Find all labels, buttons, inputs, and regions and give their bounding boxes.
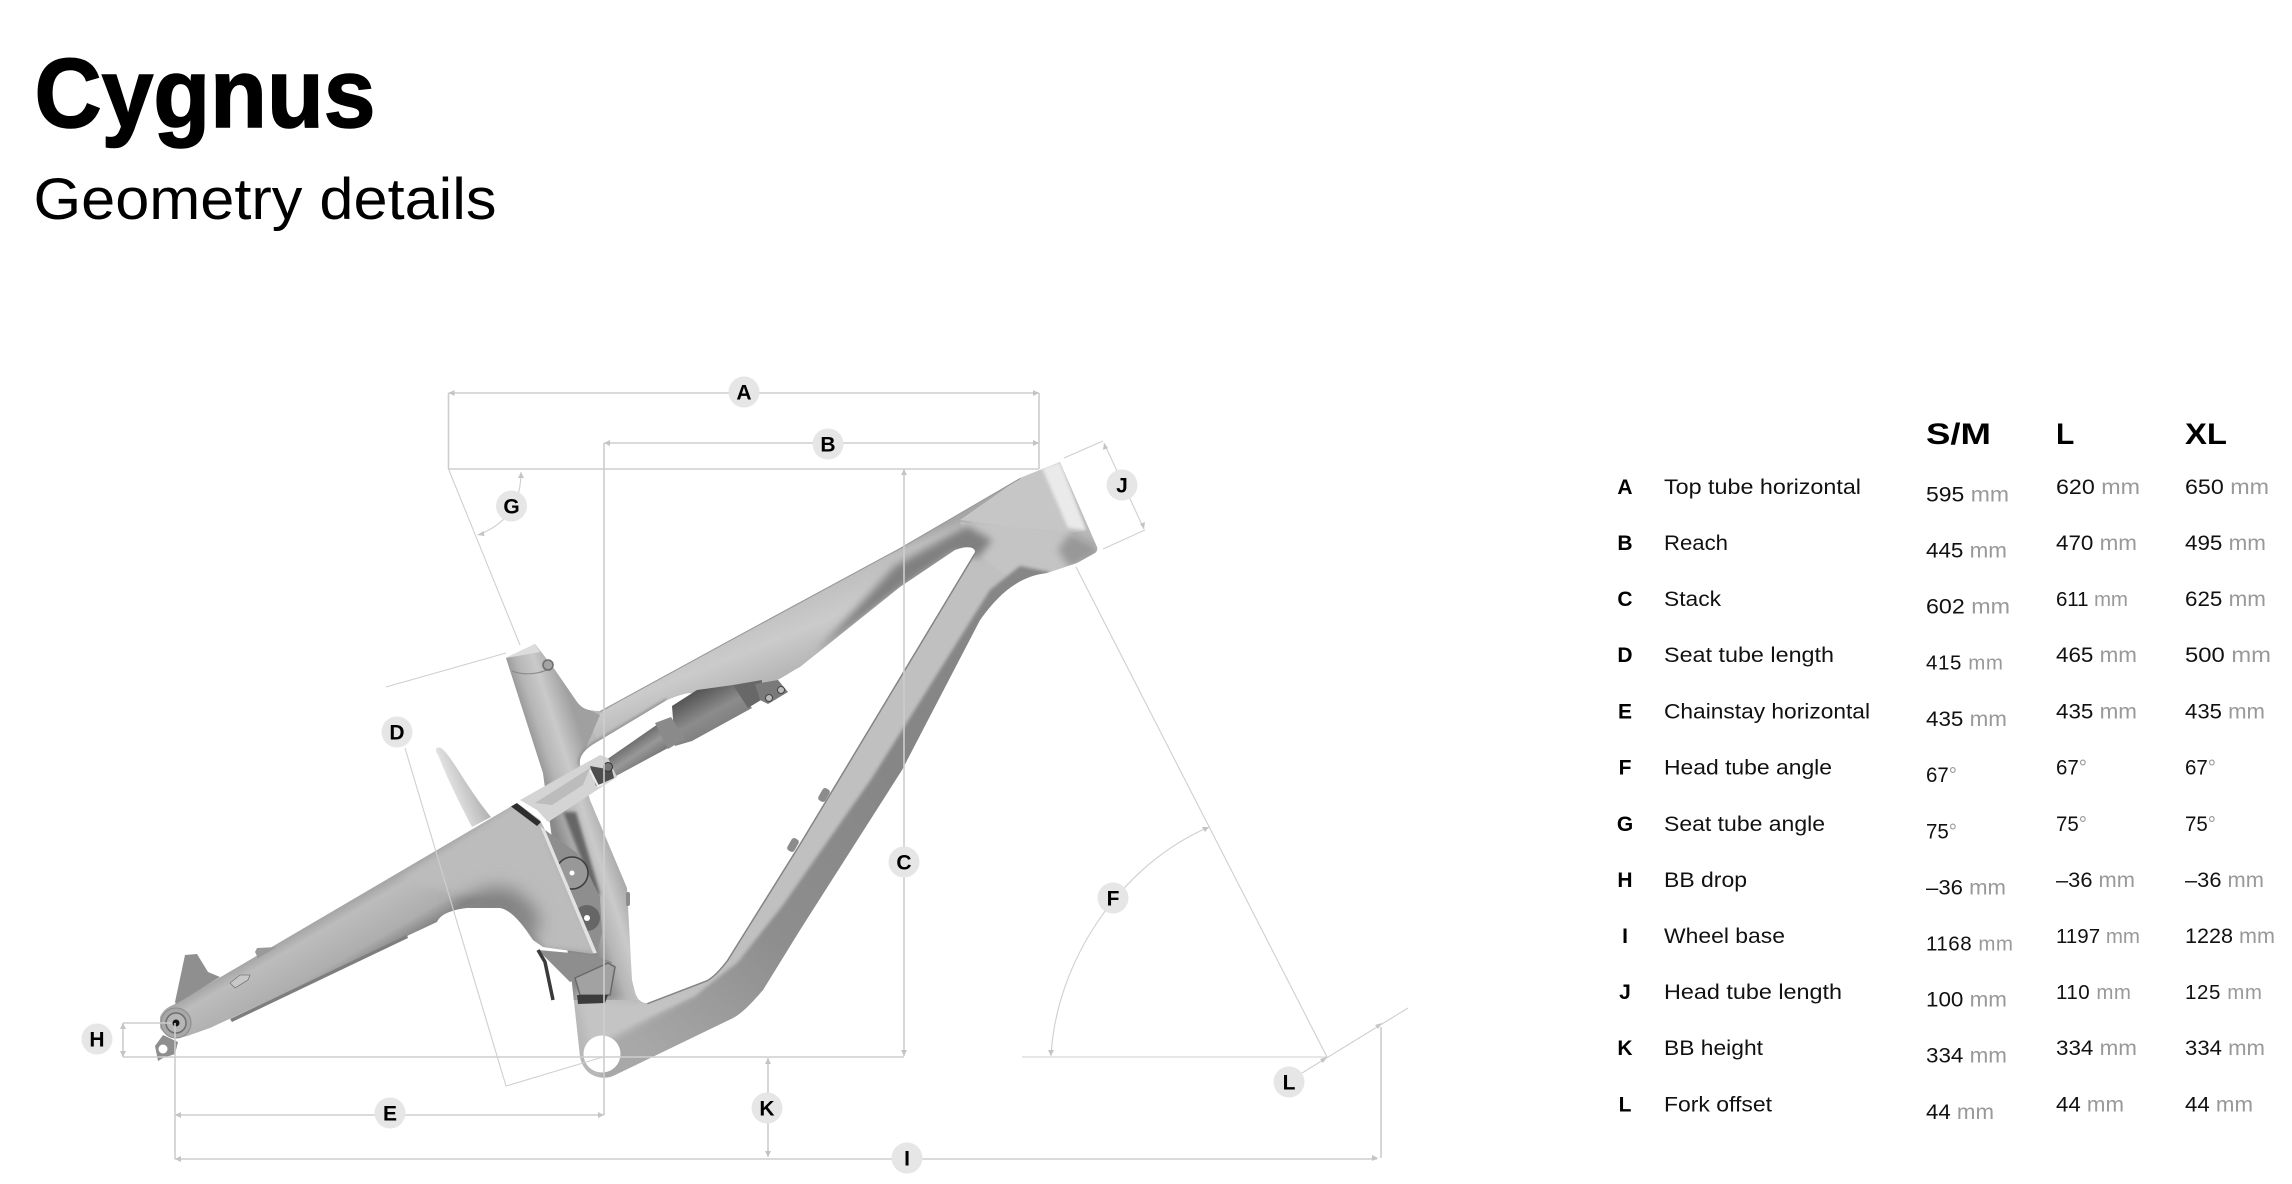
row G: 75° <box>1926 820 1957 844</box>
row K: 334 mm <box>1926 1044 2007 1068</box>
dimension A: A <box>736 382 752 404</box>
row K <box>1617 1037 2265 1068</box>
dimension lines <box>82 376 1408 1174</box>
row E: 435 mm <box>2056 700 2137 724</box>
dimension B <box>604 428 1039 1115</box>
row I: 1168 mm <box>1926 932 2013 956</box>
row A: 650 mm <box>2185 476 2269 499</box>
row H: H <box>1617 869 1633 892</box>
row A: 595 mm <box>1926 484 2009 506</box>
row A: Top tube horizontal <box>1664 476 1861 499</box>
seat tube shadow <box>563 812 600 900</box>
geometry table <box>1617 418 2275 1124</box>
row B: Reach <box>1664 532 1728 555</box>
dimension G <box>448 469 527 645</box>
dimension H <box>82 1023 172 1057</box>
row K: BB height <box>1664 1037 1763 1060</box>
row B <box>1617 532 2266 562</box>
row L: Fork offset <box>1664 1094 1772 1116</box>
seat tube boss <box>626 892 630 906</box>
row I: Wheel base <box>1664 925 1785 948</box>
row A: 620 mm <box>2056 476 2140 499</box>
dimension B: B <box>820 434 836 456</box>
row B: 470 mm <box>2056 532 2137 555</box>
dimension D <box>382 653 603 1086</box>
dimension I: I <box>904 1148 910 1170</box>
row J <box>1619 981 2262 1012</box>
row D: D <box>1617 644 1633 667</box>
dropout <box>155 1008 191 1061</box>
row D <box>1617 644 2271 674</box>
subtitle: Geometry details <box>34 167 496 232</box>
dimension D: D <box>389 722 405 744</box>
dimension G: G <box>503 496 520 518</box>
dimension K <box>752 1058 782 1157</box>
row G: G <box>1617 813 1633 836</box>
column headers: L <box>2056 418 2074 451</box>
brake mount <box>175 954 220 1004</box>
row A <box>1617 476 2269 506</box>
fender <box>436 747 491 827</box>
row C: Stack <box>1664 588 1722 611</box>
row E <box>1618 700 2265 731</box>
bolt <box>230 975 250 988</box>
dimension E: E <box>383 1102 397 1126</box>
row G <box>1617 813 2216 844</box>
row E: E <box>1618 700 1632 724</box>
dimension I <box>175 1027 1381 1174</box>
row I: 1197 mm <box>2056 925 2140 948</box>
rocker link <box>520 755 617 822</box>
row A: A <box>1617 476 1633 499</box>
row H: –36 mm <box>1926 876 2006 900</box>
row C: C <box>1617 588 1633 611</box>
row C <box>1617 588 2266 618</box>
dimension J <box>1064 441 1145 549</box>
row I: 1228 mm <box>2185 925 2275 948</box>
bottom bracket <box>584 1036 620 1072</box>
column headers: S/M <box>1926 418 1991 451</box>
row L: 44 mm <box>2185 1094 2253 1116</box>
dimension F <box>1022 567 1327 1057</box>
row D: 500 mm <box>2185 644 2271 667</box>
column headers <box>1926 418 2227 451</box>
dimension H: H <box>89 1028 105 1052</box>
row D: 415 mm <box>1926 652 2003 674</box>
row C: 611 mm <box>2056 588 2128 611</box>
frame opening <box>580 547 975 1003</box>
row E: 435 mm <box>2185 700 2265 724</box>
row I <box>1622 925 2275 956</box>
swingarm <box>160 800 600 1037</box>
row H: BB drop <box>1664 869 1747 892</box>
row F <box>1619 756 2216 787</box>
row C: 625 mm <box>2185 588 2266 611</box>
dimension E <box>175 1023 604 1159</box>
row F: 67° <box>1926 764 1957 787</box>
rear mount tab <box>255 947 277 958</box>
row L: 44 mm <box>2056 1094 2124 1116</box>
row F: F <box>1619 756 1632 780</box>
bottle bosses <box>786 787 831 853</box>
row D: Seat tube length <box>1664 644 1834 667</box>
row K: 334 mm <box>2185 1037 2265 1060</box>
dimension F: F <box>1107 888 1120 910</box>
row B: B <box>1617 532 1633 555</box>
title: Cygnus <box>34 38 376 148</box>
row B: 445 mm <box>1926 540 2007 562</box>
row K: K <box>1617 1037 1633 1060</box>
lower linkage <box>545 830 602 953</box>
row H: –36 mm <box>2056 869 2135 892</box>
row F: 67° <box>2056 756 2087 780</box>
row K: 334 mm <box>2056 1037 2137 1060</box>
row F: Head tube angle <box>1664 756 1832 780</box>
row F: 67° <box>2185 756 2216 780</box>
row E: 435 mm <box>1926 708 2007 731</box>
row G: 75° <box>2056 813 2087 836</box>
row J: J <box>1619 981 1631 1004</box>
main frame <box>500 462 1097 1090</box>
dimension C: C <box>896 852 912 874</box>
dimension J: J <box>1116 474 1128 498</box>
dimension C <box>123 469 920 1057</box>
row B: 495 mm <box>2185 532 2266 555</box>
bike frame illustration <box>155 462 1097 1090</box>
row H: –36 mm <box>2185 869 2264 892</box>
row C: 602 mm <box>1926 596 2010 618</box>
row G: Seat tube angle <box>1664 813 1825 836</box>
row L <box>1619 1094 2253 1124</box>
row D: 465 mm <box>2056 644 2137 667</box>
dimension L: L <box>1283 1072 1296 1094</box>
row G: 75° <box>2185 813 2216 836</box>
row E: Chainstay horizontal <box>1664 700 1870 724</box>
column headers: XL <box>2185 418 2227 451</box>
dimension A <box>448 376 1039 469</box>
row J: 125 mm <box>2185 981 2262 1004</box>
row H <box>1617 869 2264 900</box>
motor mount <box>538 950 615 1004</box>
row L: 44 mm <box>1926 1101 1994 1124</box>
row L: L <box>1619 1094 1632 1116</box>
row I: I <box>1622 925 1628 948</box>
dimension L <box>1274 1008 1408 1098</box>
row J: 100 mm <box>1926 988 2007 1012</box>
row J: 110 mm <box>2056 981 2131 1004</box>
rear shock <box>606 680 788 776</box>
dimension K: K <box>759 1098 775 1120</box>
row J: Head tube length <box>1664 981 1842 1004</box>
